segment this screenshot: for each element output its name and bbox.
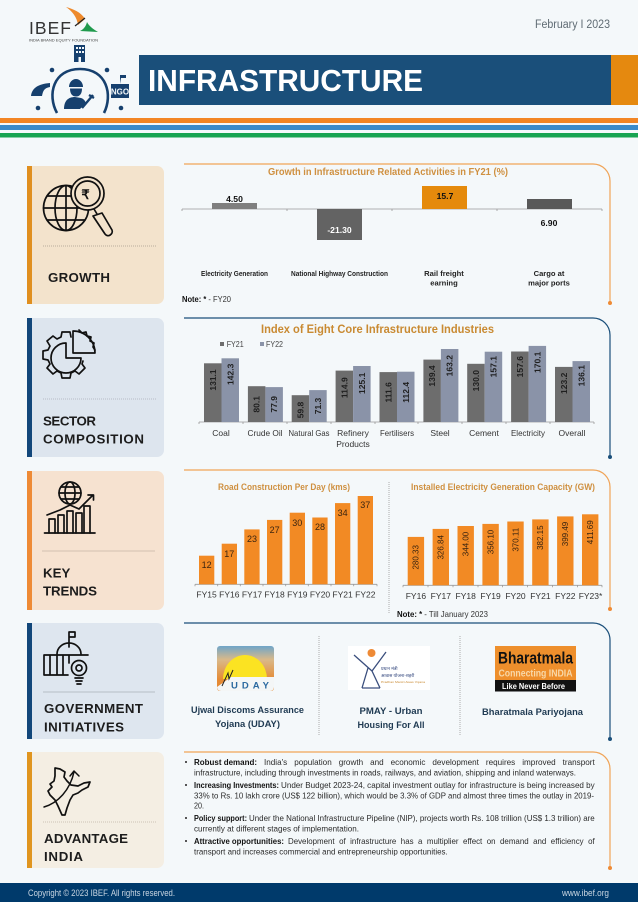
grouped bar chart: 112.4 xyxy=(401,382,411,403)
title banner: INFRASTRUCTURE xyxy=(148,63,423,98)
logo: IBEF: IBEF xyxy=(29,18,71,38)
bullet: increasing investments: Increasing Investments: xyxy=(194,780,279,790)
grouped bar chart: Crude Oil xyxy=(248,428,283,438)
chart: road construction: FY22 xyxy=(355,590,376,600)
grouped bar chart: 170.1 xyxy=(532,351,542,373)
grouped bar chart: Electricity xyxy=(511,428,546,438)
label xyxy=(43,566,97,599)
label: GOVERNMENT xyxy=(44,701,143,716)
grouped bar chart: 123.2 xyxy=(559,372,569,394)
bullet: attractive opportunities: Development of infrastructure has a multiplier effect on demand and efficiency of xyxy=(288,836,595,846)
header icon: infrastructure worker xyxy=(31,45,129,113)
label: ADVANTAGE xyxy=(44,831,128,846)
icon: India map with arrow xyxy=(44,768,90,815)
heading: Road Construction Per Day (kms) xyxy=(218,482,350,493)
logo: IBEF: INDIA BRAND EQUITY FOUNDATION xyxy=(29,38,98,42)
chart: road construction: 28 xyxy=(315,522,325,532)
bar chart: Cargo at xyxy=(534,269,565,278)
logo: UDAY: UDAY xyxy=(231,680,270,692)
scheme labels: Bharatmala Pariyojana xyxy=(482,707,584,718)
panel: advantage india card xyxy=(27,752,164,868)
scheme labels xyxy=(191,705,584,731)
logo: PMAY: प्रधान मंत्री xyxy=(381,665,398,671)
bar chart: 15.7 xyxy=(437,191,454,201)
note: Note: * - Till January 2023 xyxy=(397,609,488,619)
chart: electricity capacity: 326.84 xyxy=(437,535,446,560)
bullet: robust demand: India's population growth and economic development requires improved transport xyxy=(264,757,595,767)
grouped bar chart: 114.9 xyxy=(339,377,349,398)
legend xyxy=(220,340,283,349)
heading: Growth in Infrastructure Related Activities in FY21 (%) xyxy=(268,166,508,178)
chart: electricity capacity: FY22 xyxy=(555,591,576,601)
legend: FY22 xyxy=(266,340,283,349)
label xyxy=(44,831,128,864)
label: INITIATIVES xyxy=(44,720,124,735)
icon: building xyxy=(74,45,85,62)
note: Note: * - FY20 xyxy=(182,294,231,304)
header stripes xyxy=(0,118,638,138)
bar chart xyxy=(182,186,602,288)
bullet: robust demand xyxy=(185,757,595,777)
grouped bar chart: 136.1 xyxy=(576,365,586,386)
label: GROWTH xyxy=(48,270,110,285)
grouped bar chart: Steel xyxy=(430,428,450,438)
label: TRENDS xyxy=(43,584,97,599)
footer: Copyright © 2023 IBEF. All rights reserved. xyxy=(28,888,175,898)
grouped bar chart: Coal xyxy=(212,428,230,438)
chart: electricity capacity: FY16 xyxy=(406,591,426,601)
footer xyxy=(0,883,638,902)
panel: government initiatives card xyxy=(27,623,164,739)
chart: electricity capacity: 399.49 xyxy=(561,521,570,546)
bullet: robust demand: infrastructure, including through investments in roads, railways, and aviation, shipping and inland waterways. xyxy=(194,767,576,777)
scheme labels: Housing For All xyxy=(358,720,424,731)
label: KEY xyxy=(43,566,70,581)
panel: government schemes xyxy=(184,623,612,741)
scheme labels: Ujwal Discoms Assurance xyxy=(191,705,304,716)
bar chart: Electricity Generation xyxy=(201,269,268,278)
grouped bar chart: 157.6 xyxy=(515,356,525,377)
bullet: increasing investments: 20. xyxy=(194,800,204,810)
logo: Bharatmala: Like Never Before xyxy=(502,681,565,691)
icon: globe with rising bars xyxy=(44,482,95,533)
chart: road construction: FY19 xyxy=(287,590,308,600)
bar chart: National Highway Construction xyxy=(291,269,388,278)
panel: key trends card xyxy=(27,471,164,610)
bullet: increasing investments: 33% to Rs. 10 lakh crore (US$ 122 billion), which would be 3.3% of GDP and almost three times the outlay in 2019- xyxy=(194,790,594,800)
grouped bar chart: Cement xyxy=(469,428,500,438)
bullet: robust demand: Robust demand: xyxy=(194,757,257,767)
icon: gear with pie xyxy=(43,330,95,378)
chart: road construction: FY20 xyxy=(310,590,330,600)
chart: road construction: 23 xyxy=(247,534,257,544)
chart: road construction: FY21 xyxy=(332,590,353,600)
title banner xyxy=(139,55,638,105)
grouped bar chart: 125.1 xyxy=(357,372,367,394)
grouped bar chart xyxy=(199,346,594,449)
grouped bar chart: Fertilisers xyxy=(380,428,414,438)
grouped bar chart: 157.1 xyxy=(488,356,498,377)
chart: electricity capacity: FY18 xyxy=(456,591,476,601)
chart: road construction: 27 xyxy=(270,525,280,535)
grouped bar chart: 111.6 xyxy=(383,382,393,402)
grouped bar chart: 130.0 xyxy=(471,370,481,391)
panel: sector composition card xyxy=(27,318,164,457)
bullet: increasing investments xyxy=(185,780,595,810)
icon: NGO box: NGO xyxy=(111,88,129,96)
bar chart: 4.50 xyxy=(226,194,243,204)
logo: UDAY xyxy=(217,646,274,692)
chart: electricity capacity: 411.69 xyxy=(586,520,595,544)
chart: electricity capacity xyxy=(403,482,603,601)
bullet: policy support: Policy support: xyxy=(194,813,247,823)
panel: core industries chart xyxy=(184,318,612,459)
chart: road construction: FY16 xyxy=(219,590,240,600)
chart: electricity capacity: FY19 xyxy=(480,591,501,601)
grouped bar chart: 71.3 xyxy=(313,397,323,414)
grouped bar chart: Refinery xyxy=(337,428,370,438)
label xyxy=(44,701,143,735)
bar chart: -21.30 xyxy=(327,225,352,235)
bullet: policy support: currently at different stages of implementation. xyxy=(194,823,359,833)
scheme labels: PMAY - Urban xyxy=(360,706,423,717)
bullet: attractive opportunities: transport and increases commercial and entrepreneurship opportunities. xyxy=(194,846,448,856)
grouped bar chart: 77.9 xyxy=(269,396,279,413)
panel: advantage india text xyxy=(184,752,612,870)
label xyxy=(43,414,144,447)
chart: electricity capacity: FY17 xyxy=(431,591,451,601)
chart: road construction: 30 xyxy=(292,518,302,528)
chart: road construction: 34 xyxy=(338,508,348,518)
logo: IBEF xyxy=(29,7,98,42)
heading: Installed Electricity Generation Capacity (GW) xyxy=(411,482,595,493)
grouped bar chart: 163.2 xyxy=(445,355,455,376)
icon: worker xyxy=(64,79,94,109)
grouped bar chart: 142.3 xyxy=(225,363,235,385)
chart: electricity capacity: 382.15 xyxy=(536,525,545,550)
grouped bar chart: 59.8 xyxy=(296,401,306,418)
scheme labels: Yojana (UDAY) xyxy=(215,719,280,730)
label: INDIA xyxy=(44,849,83,864)
chart: road construction: FY17 xyxy=(242,590,262,600)
chart: electricity capacity: 370.11 xyxy=(511,527,520,552)
logo: PMAY: Pradhan Mantri Awas Yojana xyxy=(381,680,425,684)
panel: growth chart xyxy=(182,164,612,305)
bullet: increasing investments: Under Budget 2023-24, capital investment outlay for infrastructure is being increased by xyxy=(281,780,595,790)
chart: road construction: 17 xyxy=(224,549,234,559)
panel: growth card xyxy=(27,166,164,304)
label: COMPOSITION xyxy=(43,432,144,447)
chart: electricity capacity: FY20 xyxy=(505,591,526,601)
bullet: attractive opportunities xyxy=(185,836,595,856)
logo: Bharatmala: Connecting INDIA xyxy=(498,668,573,680)
bar chart: 6.90 xyxy=(541,218,558,228)
chart: electricity capacity: 344.00 xyxy=(462,531,470,556)
chart: road construction: FY15 xyxy=(196,590,217,600)
grouped bar chart: 131.1 xyxy=(208,369,218,391)
logo: PMAY xyxy=(348,646,430,690)
chart: road construction: 12 xyxy=(202,560,212,570)
bullet: policy support xyxy=(185,813,595,833)
bar chart: Rail freight xyxy=(424,269,464,278)
chart: road construction: 37 xyxy=(360,500,370,510)
date: February I 2023 xyxy=(535,19,610,31)
chart: road construction: FY18 xyxy=(264,590,285,600)
grouped bar chart: Products xyxy=(336,439,370,449)
icon: government building with bulb xyxy=(44,632,88,684)
logo: Bharatmala xyxy=(495,646,576,692)
logo: PMAY: आवास योजना-शहरी xyxy=(381,672,415,678)
bullet: policy support: Under the National Infrastructure Pipeline (NIP), projects worth Rs. 108 trillion (US$ 1.3 trillion) are xyxy=(249,813,595,823)
icon: globe with magnifier: ₹ xyxy=(81,187,90,202)
panel: key trends charts xyxy=(184,470,612,619)
grouped bar chart: Natural Gas xyxy=(288,428,330,438)
chart: electricity capacity: FY21 xyxy=(530,591,551,601)
grouped bar chart: 80.1 xyxy=(252,396,262,413)
grouped bar chart: 139.4 xyxy=(427,365,437,387)
legend: FY21 xyxy=(227,340,244,349)
bar chart: earning xyxy=(430,278,458,288)
label: SECTOR xyxy=(43,414,96,428)
bullet: attractive opportunities: Attractive opportunities: xyxy=(194,836,284,846)
icon: road xyxy=(31,83,50,96)
chart: electricity capacity: 280.33 xyxy=(412,545,421,570)
bar chart: major ports xyxy=(528,278,570,288)
chart: road construction xyxy=(195,482,377,600)
logo: Bharatmala: Bharatmala xyxy=(498,648,573,668)
heading: Index of Eight Core Infrastructure Industries xyxy=(261,322,494,336)
footer: www.ibef.org xyxy=(561,888,609,898)
grouped bar chart: Overall xyxy=(559,428,586,438)
chart: electricity capacity: FY23* xyxy=(579,591,603,601)
chart: electricity capacity: 356.10 xyxy=(486,529,495,554)
